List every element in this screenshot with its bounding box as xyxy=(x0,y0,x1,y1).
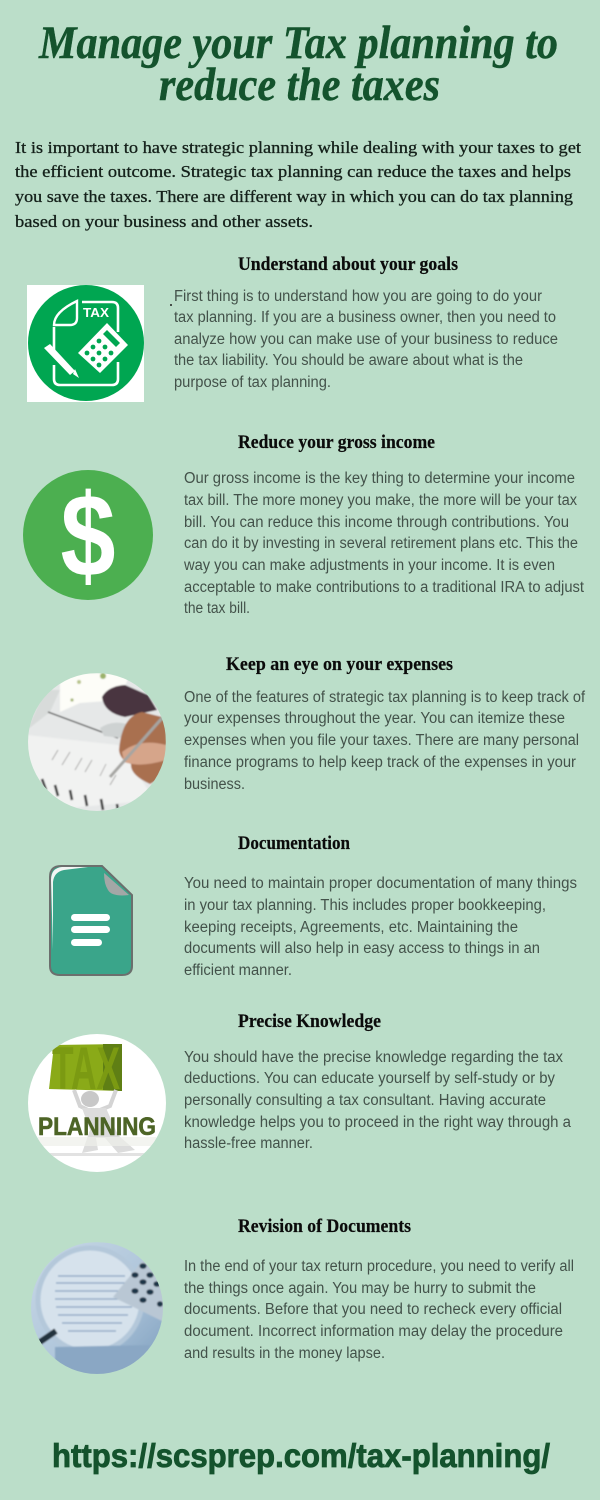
icon: hand writing in notebook photo xyxy=(27,673,166,812)
heading: understand about your goals: Understand about your goals xyxy=(238,255,458,275)
heading: precise knowledge: Precise Knowledge xyxy=(238,1012,381,1032)
body text xyxy=(184,875,577,979)
body text: business. xyxy=(184,776,245,793)
title: Manage your Tax planning to xyxy=(38,17,558,69)
footer url: https://scsprep.com/tax-planning/ xyxy=(52,1437,550,1474)
body text: expenses when you file your taxes. There are many personal xyxy=(184,732,579,749)
intro paragraph: you save the taxes. There are different way in which you can do tax planning xyxy=(15,187,573,206)
icon: magnifier over tax form xyxy=(30,1242,170,1375)
body text: In the end of your tax return procedure, you need to verify all xyxy=(184,1258,574,1275)
body text: and results in the money lapse. xyxy=(184,1345,385,1362)
panel: reduce your gross income xyxy=(23,433,585,617)
body text: deductions. You can educate yourself by self-study or by xyxy=(184,1070,555,1087)
heading: revision of documents: Revision of Documents xyxy=(238,1217,411,1237)
body text: Our gross income is the key thing to determine your income xyxy=(184,470,575,487)
body text: tax planning. If you are a business owner, then you need to xyxy=(174,309,556,326)
icon: dollar coin xyxy=(23,470,153,602)
icon: tax planning figure: PLANNING xyxy=(38,1113,156,1141)
body text: documents. Before that you need to recheck every official xyxy=(184,1301,562,1318)
icon: green document xyxy=(50,866,132,975)
panel: revision of documents xyxy=(30,1217,574,1375)
body text: hassle-free manner. xyxy=(184,1135,313,1152)
body text: the tax bill. xyxy=(184,600,250,617)
body text: acceptable to make contributions to a traditional IRA to adjust xyxy=(184,579,585,596)
body text xyxy=(184,1258,574,1362)
body text: personally consulting a tax consultant. Having accurate xyxy=(184,1092,546,1109)
panel: documentation xyxy=(50,834,577,979)
body text: You should have the precise knowledge regarding the tax xyxy=(184,1049,563,1066)
heading: keep an eye on your expenses: Keep an eye on your expenses xyxy=(226,655,453,675)
body text: finance programs to help keep track of the expenses in your xyxy=(184,754,576,771)
body text: the tax liability. You should be aware about what is the xyxy=(174,352,523,369)
body text: analyze how you can make use of your business to reduce xyxy=(174,331,558,348)
intro paragraph xyxy=(15,138,581,231)
body text xyxy=(183,470,585,617)
icon: tax planning figure xyxy=(27,1033,166,1172)
title xyxy=(38,17,558,111)
title: reduce the taxes xyxy=(159,59,440,111)
body text: way you can make adjustments in your income. It is even xyxy=(183,557,555,574)
body text: the things once again. You may be hurry to submit the xyxy=(184,1280,536,1297)
body text: efficient manner. xyxy=(184,962,292,979)
body text: your expenses throughout the year. You can itemize these xyxy=(184,710,565,727)
heading: reduce your gross income: Reduce your gross income xyxy=(238,433,435,453)
body text: documents will also help in easy access to things in an xyxy=(184,940,540,957)
stray dot xyxy=(170,304,172,306)
icon: tax planning figure: TAX xyxy=(52,1035,120,1102)
body text: document. Incorrect information may delay the procedure xyxy=(184,1323,563,1340)
intro paragraph: It is important to have strategic planning while dealing with your taxes to get xyxy=(15,138,581,157)
icon: tax document with calculator xyxy=(27,285,144,402)
body text: purpose of tax planning. xyxy=(174,374,331,391)
panel: precise knowledge xyxy=(27,1012,571,1172)
heading: documentation: Documentation xyxy=(238,834,351,854)
body text: in your tax planning. This includes proper bookkeeping, xyxy=(184,897,546,914)
body text: can do it by investing in several retirement plans etc. This the xyxy=(184,535,578,552)
body text xyxy=(174,288,558,391)
icon: tax document with calculator: TAX xyxy=(83,305,109,320)
panel: keep an eye on your expenses xyxy=(27,655,586,812)
intro paragraph: the efficient outcome. Strategic tax planning can reduce the taxes and helps xyxy=(15,162,571,181)
body text: knowledge helps you to proceed in the right way through a xyxy=(184,1114,571,1131)
body text: One of the features of strategic tax planning is to keep track of xyxy=(184,689,586,706)
body text: tax bill. The more money you make, the more will be your tax xyxy=(184,492,577,509)
panel: understand about your goals xyxy=(27,255,558,402)
intro paragraph: based on your business and other assets. xyxy=(15,212,313,231)
body text xyxy=(184,689,586,793)
body text: You need to maintain proper documentation of many things xyxy=(184,875,577,892)
body text: keeping receipts, Agreements, etc. Maintaining the xyxy=(184,919,518,936)
icon: dollar coin: $ xyxy=(60,470,116,602)
body text xyxy=(184,1049,571,1152)
body text: First thing is to understand how you are going to do your xyxy=(174,288,542,305)
body text: bill. You can reduce this income through contributions. You xyxy=(184,514,569,531)
